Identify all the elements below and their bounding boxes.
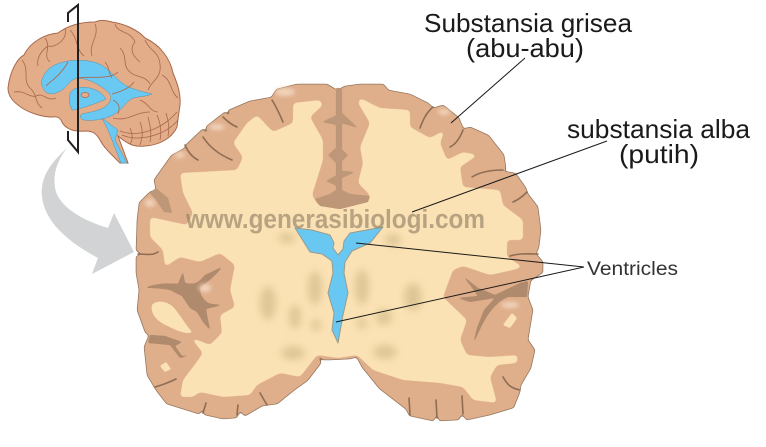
deep grey nuclei [260,233,422,360]
small brain ventricle veins [46,62,134,114]
small brain pineal detail [81,92,89,98]
cutting plane [68,5,78,152]
arrow: grey curved arrow from small brain to section [42,148,134,274]
small brain outline [8,20,180,163]
leader line: grey matter [451,58,525,123]
small brain cortex folds [14,24,178,119]
label: substansia alba: (putih) [619,139,699,169]
sulcus: left lower fissure [148,335,192,358]
watermark: www.generasibiologi.com [185,206,485,234]
icon: small side-view brain with ventricles [8,5,180,163]
small brain cerebellum folds [120,112,178,145]
sulcus: left lateral fissure [145,267,222,330]
section outline [137,85,542,420]
small brain third ventricle [69,87,106,110]
leader lines: ventricles [336,243,584,322]
small brain fourth ventricle and canal [102,118,127,163]
label: Ventricles: Ventricles [587,259,678,280]
sulcus: folds [138,100,538,418]
white matter small islands [160,313,517,372]
sulcus: left upper wedge [150,188,172,213]
panel: coronal section of the brain [137,85,542,420]
white matter [150,98,523,403]
label: substansia alba: substansia alba [567,114,751,144]
ventricles [295,227,383,343]
label: Substansia grisea [424,8,633,63]
leader line: white matter [412,141,607,212]
small brain ventricle [42,60,152,120]
white matter island left gyrus [152,302,192,333]
label: substansia alba [567,114,751,169]
grey matter [137,85,542,420]
gyrus highlights [145,88,519,308]
label: Substansia grisea: (abu-abu) [466,33,584,63]
medial fissure and base [315,88,370,209]
label: Substansia grisea: Substansia grisea [424,8,633,38]
sulcus: right lateral fissure [458,276,528,344]
